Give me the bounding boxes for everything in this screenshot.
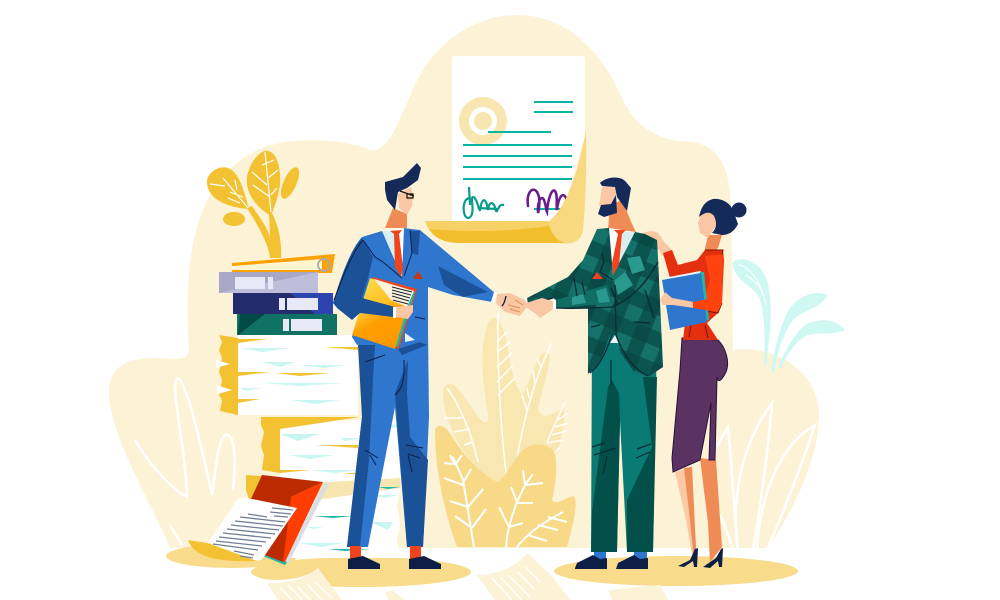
ground shadow center — [251, 557, 471, 587]
signature teal — [464, 187, 504, 218]
lapel and fold lines — [528, 253, 658, 376]
socks — [350, 546, 421, 559]
glasses — [400, 191, 414, 198]
shirt at waist — [405, 333, 415, 342]
paper stack top — [216, 335, 358, 415]
forearm sleeve — [693, 297, 722, 312]
paper stack middle — [261, 417, 407, 478]
leaf veins — [210, 152, 278, 212]
pants — [347, 330, 429, 547]
pants lines — [365, 360, 423, 472]
skirt — [672, 338, 728, 472]
ground shadow right — [554, 556, 798, 586]
belt — [398, 342, 427, 355]
pants shadow — [347, 345, 428, 547]
hair — [385, 163, 421, 210]
face — [398, 187, 413, 215]
sleeve cuff — [393, 307, 396, 318]
stem — [247, 206, 281, 258]
floor notch — [250, 568, 332, 590]
shoes — [348, 556, 380, 569]
far leg — [675, 467, 696, 560]
jacket — [333, 228, 495, 345]
neck and head — [608, 200, 636, 232]
right background plant lines — [717, 403, 815, 550]
cuff — [553, 300, 556, 310]
seal — [459, 97, 507, 145]
socks — [594, 552, 647, 560]
folder — [373, 277, 417, 349]
man blue suit — [333, 163, 528, 569]
pocket flap — [365, 355, 385, 362]
small stack tab — [246, 475, 262, 502]
book green — [237, 314, 337, 335]
forearm — [337, 297, 395, 320]
right leaf — [247, 151, 280, 216]
shoes — [575, 555, 607, 569]
pants — [591, 335, 657, 552]
center back plant — [443, 313, 568, 490]
shaking hand — [496, 293, 528, 316]
white belt triangle — [610, 335, 619, 343]
small leaf bottom — [223, 212, 245, 226]
man green suit — [525, 178, 663, 569]
holding hand — [396, 305, 413, 319]
binder top — [232, 254, 335, 273]
pants shadow — [591, 377, 657, 552]
woman — [643, 199, 746, 568]
forearm — [556, 285, 613, 308]
neck — [385, 208, 407, 228]
text lines — [463, 102, 573, 209]
right hand — [526, 298, 555, 318]
holding hand — [660, 292, 694, 308]
background blob — [109, 15, 819, 548]
raised arm — [643, 231, 674, 258]
open page — [188, 498, 297, 561]
bright cloth patches — [572, 256, 645, 305]
fold highlight — [425, 221, 549, 231]
hair bun — [732, 202, 746, 218]
ground shadow left — [166, 544, 298, 568]
blue folder — [664, 271, 703, 281]
reflections on floor — [267, 553, 668, 600]
blouse — [663, 250, 724, 340]
folder document — [374, 279, 414, 307]
document — [425, 56, 586, 244]
tie — [390, 230, 403, 277]
paper sheet — [452, 56, 585, 222]
small leaf right — [277, 165, 303, 201]
right teal plant — [732, 259, 845, 372]
lapel lines — [334, 230, 425, 319]
face — [698, 211, 718, 238]
page curl — [548, 130, 586, 244]
red book — [250, 475, 329, 565]
jacket — [527, 228, 663, 377]
veins — [444, 455, 567, 547]
shirt — [609, 228, 635, 275]
tie — [612, 230, 626, 275]
hair — [600, 178, 631, 211]
signature purple — [528, 190, 575, 213]
bottom fold — [425, 221, 565, 243]
jacket dark areas — [333, 238, 395, 317]
pants creases — [592, 360, 651, 474]
paper stack bottom — [270, 478, 400, 558]
center front plant — [435, 426, 576, 547]
cuff left — [525, 298, 528, 305]
book gray — [219, 272, 318, 293]
hair — [699, 199, 738, 235]
plant top left — [207, 151, 303, 258]
pocket square — [413, 271, 423, 279]
beard — [598, 195, 617, 217]
pocket square — [592, 272, 603, 279]
right heel — [703, 548, 723, 568]
left heel — [678, 548, 698, 567]
book blue — [233, 293, 333, 314]
left background plant lines — [135, 379, 235, 545]
shirt — [382, 228, 404, 277]
left leaf — [207, 167, 249, 209]
cuff — [491, 292, 497, 303]
neck — [702, 235, 722, 262]
near leg — [700, 458, 722, 562]
